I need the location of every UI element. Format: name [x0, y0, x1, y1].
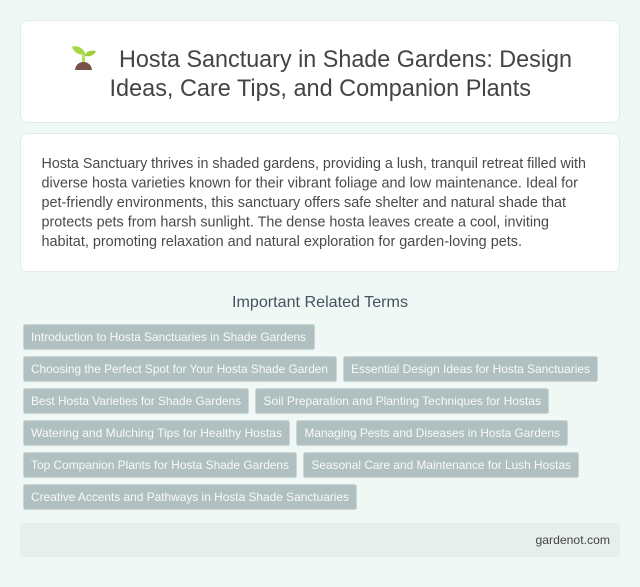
- title text: [110, 46, 572, 102]
- tag: accents and pathways: [24, 484, 356, 510]
- tag: soil preparation: Soil Preparation and Planting Techniques for Hostas: [264, 394, 541, 408]
- title text: Ideas, Care Tips, and Companion Plants: [110, 75, 531, 102]
- description text: protects pets from harsh sunlight. The dense hosta leaves create a cool, inviting: [42, 214, 549, 230]
- description text: habitat, promoting relaxation and natural exploration for garden-loving pets.: [42, 234, 522, 250]
- tag: introduction: Introduction to Hosta Sanctuaries in Shade Gardens: [31, 330, 306, 344]
- description text: Hosta Sanctuary thrives in shaded gardens, providing a lush, tranquil retreat filled with: [42, 156, 586, 172]
- tag: seasonal care: [304, 452, 578, 478]
- panel: related term tags: [24, 324, 598, 510]
- icon: seedling: [72, 46, 96, 70]
- tag: introduction: [24, 324, 314, 350]
- tag: pests: Managing Pests and Diseases in Hosta Gardens: [304, 426, 560, 440]
- tag: seasonal care: Seasonal Care and Maintenance for Lush Hostas: [312, 458, 571, 472]
- title text: Hosta Sanctuary in Shade Gardens: Design: [119, 46, 572, 73]
- tag: choosing the spot: [24, 356, 336, 382]
- tag: design ideas: Essential Design Ideas for Hosta Sanctuaries: [351, 362, 590, 376]
- footer: [20, 523, 620, 557]
- panel: title: [20, 20, 620, 122]
- tag: accents and pathways: Creative Accents and Pathways in Hosta Shade Sanctuaries: [31, 490, 349, 504]
- heading: related terms: Important Related Terms: [232, 294, 408, 311]
- description text: pet-friendly environments, this sanctuary offers safe shelter and natural shade that: [42, 195, 566, 211]
- tag: companion plants: [24, 452, 296, 478]
- tag: varieties: [24, 388, 248, 414]
- tag: watering: Watering and Mulching Tips for Healthy Hostas: [31, 426, 282, 440]
- tag: soil preparation: [256, 388, 548, 414]
- tag: watering: [24, 420, 290, 446]
- description text: diverse hosta varieties known for their vibrant foliage and low maintenance. Ideal for: [42, 176, 578, 192]
- tag: pests: [296, 420, 568, 446]
- tag: design ideas: [344, 356, 598, 382]
- footer source: gardenot.com: [536, 533, 610, 547]
- tag: varieties: Best Hosta Varieties for Shade Gardens: [31, 394, 241, 408]
- description text: [42, 156, 586, 250]
- tag: companion plants: Top Companion Plants for Hosta Shade Gardens: [31, 458, 289, 472]
- panel: description: [20, 134, 620, 272]
- tag: choosing the spot: Choosing the Perfect Spot for Your Hosta Shade Garden: [31, 362, 328, 376]
